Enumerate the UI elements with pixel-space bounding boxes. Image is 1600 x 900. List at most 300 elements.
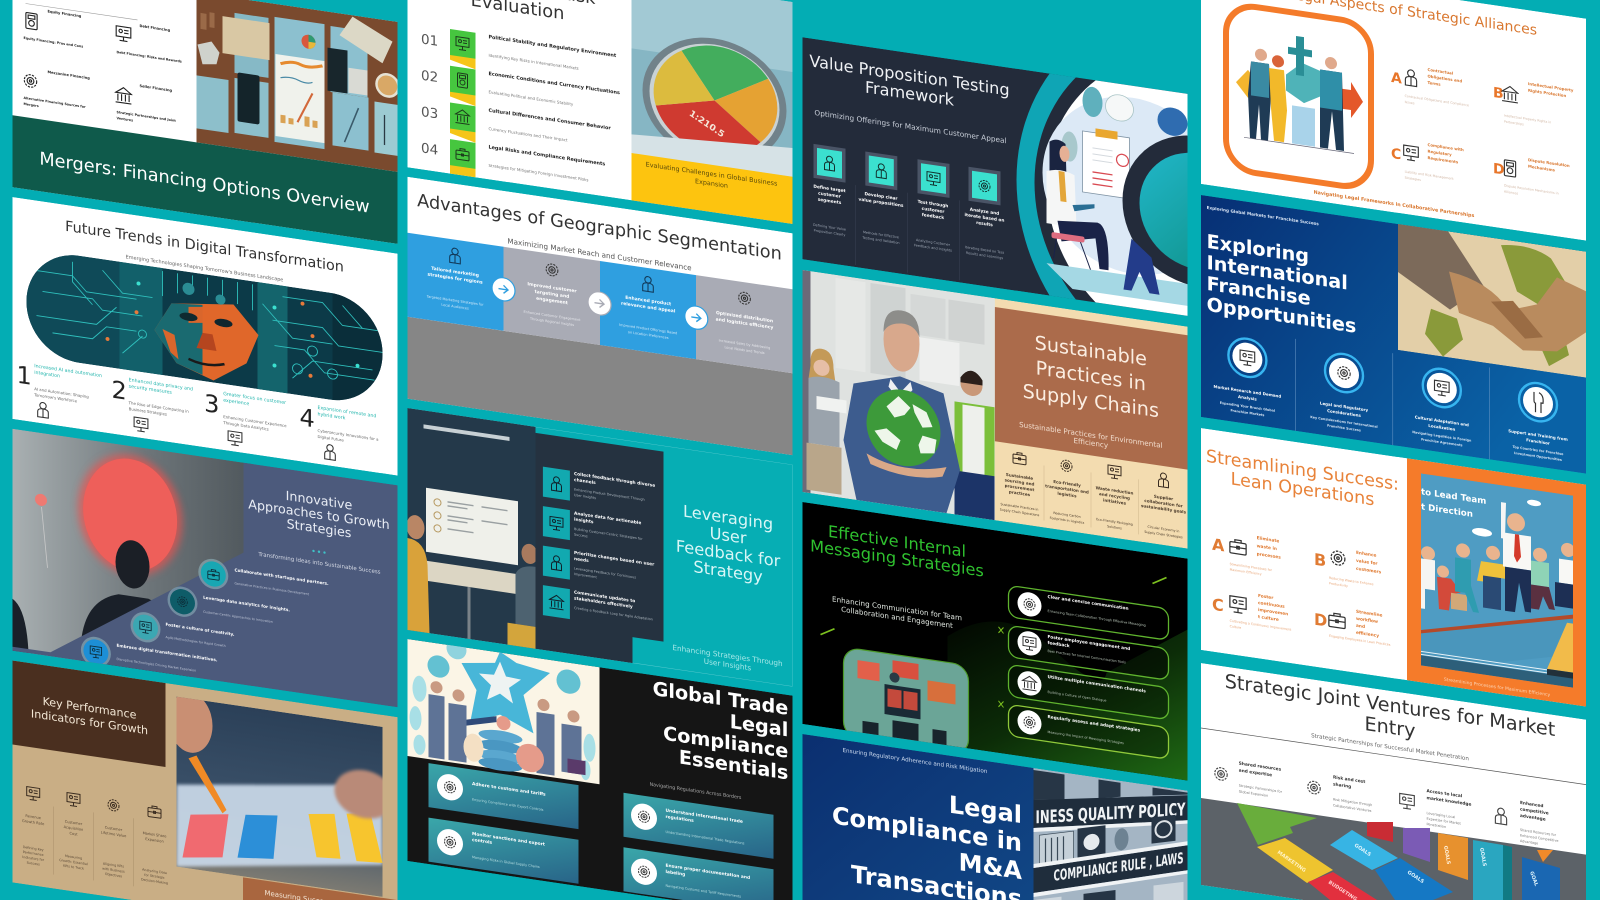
- column 2: [1045, 457, 1089, 526]
- column 2: Reducing Carbon: [1053, 511, 1081, 519]
- column 1: strategies for regions: [428, 272, 483, 286]
- card 4: [624, 847, 774, 900]
- arrow 1: [492, 276, 515, 303]
- step 2: Methods for Effective: [863, 230, 899, 239]
- item: revenue growth rate: Revenue: [25, 814, 41, 820]
- title: Exploring: [1207, 230, 1309, 268]
- item B: [1314, 544, 1382, 593]
- item 2: Enhanced data privacy and: [129, 378, 193, 393]
- item: revenue growth rate: Defining Key: [23, 845, 44, 852]
- item 1: Shared resources: [1239, 762, 1281, 773]
- column 3: on Location Preferences: [628, 330, 669, 340]
- item 2: insights: [574, 516, 594, 525]
- card 1: Ensuring Compliance with Export Controls: [472, 797, 544, 812]
- title: Framework: [865, 78, 955, 110]
- item B: Reducing Waste to Enhance: [1329, 576, 1373, 586]
- item: customer acquisition cost: Cost: [70, 831, 78, 837]
- item 4: advantage: [1520, 813, 1546, 823]
- title: Future Trends in Digital Transformation: [65, 219, 344, 276]
- step 2: [859, 151, 904, 246]
- item 2: Leverage data analytics for insights.: [203, 595, 290, 613]
- item D: [1314, 603, 1391, 647]
- arrow 2: [588, 290, 611, 317]
- item: market share expansion: Decision-Making: [141, 877, 168, 885]
- subtitle: Strategic Partnerships for Successful Market Penetration: [1311, 733, 1469, 762]
- item 2: [168, 586, 290, 623]
- item C: continuous: [1258, 600, 1285, 610]
- item 4: Disruptive Technologies Driving Market Expansion: [116, 657, 196, 673]
- title: Compliance: [663, 722, 788, 763]
- title: Opportunities: [1207, 293, 1356, 338]
- title band: [12, 115, 398, 244]
- column 1: Supply Chain Operations: [1000, 508, 1040, 517]
- item 2: Risk and cost: [1333, 775, 1365, 785]
- item B: B: [1314, 550, 1326, 570]
- step 4: Analyze and: [970, 208, 999, 217]
- step 3: customer: [922, 206, 945, 215]
- title box: [12, 660, 166, 767]
- subtitle: Ensuring Regulatory Adherence and Risk Mitigation: [842, 748, 988, 775]
- item 1: Increased AI and automation: [34, 364, 102, 379]
- image: team illustration: [1421, 473, 1575, 693]
- eyebrow: Exploring Global Markets for Franchise Success: [1207, 205, 1319, 226]
- item C: C: [1391, 146, 1401, 163]
- card 4: Measuring the Impact of Messaging Strategies: [1048, 730, 1124, 745]
- photo floor: [1201, 798, 1586, 900]
- item D: Mechanisms: [1528, 164, 1556, 173]
- column 4: [1141, 470, 1187, 540]
- item 1: User Insights: [574, 493, 596, 500]
- item 3: Leveraging Feedback for Continuous: [574, 566, 636, 580]
- card 2: Managing Risks in Global Supply Chains: [472, 855, 540, 869]
- column 4: Supply Chain Strategies: [1144, 530, 1183, 539]
- item 4: Cybersecurity Innovations for a: [318, 428, 379, 442]
- title: Advantages of Geographic Segmentation: [417, 190, 782, 265]
- photo: coloured goal blocks: MARKETING: [1276, 850, 1307, 874]
- step 4: [965, 166, 1005, 261]
- item C: C: [1212, 595, 1224, 615]
- item: customer lifetime value: Customer: [105, 826, 122, 832]
- item: customer lifetime value: Objectives: [105, 872, 122, 878]
- title: Feedback for: [676, 537, 781, 571]
- item: customer lifetime value: Aligning KPIs: [103, 862, 124, 869]
- title: Mergers: Financing Options Overview: [39, 148, 370, 218]
- item B: Intellectual Property Rights in: [1504, 114, 1551, 124]
- item 3: Franchise Agreements: [1421, 437, 1463, 447]
- item D: Alliances: [1504, 190, 1519, 196]
- caption box: [243, 877, 398, 900]
- slide: Effective Internal Messaging Strategies: [802, 502, 1188, 788]
- item 1: [19, 364, 102, 419]
- column 4: Optimized distribution: [716, 311, 773, 324]
- grey lower area: [408, 317, 792, 455]
- item: revenue growth rate: Performance: [23, 850, 44, 857]
- item 3: needs: [574, 556, 589, 564]
- subtitle: Sustainable Practices for Environmental: [1019, 420, 1162, 450]
- photo: meeting room: [406, 408, 538, 649]
- slide: Leveraging User Feedback: [406, 408, 792, 687]
- item A: [1212, 529, 1281, 579]
- items: financing types: Equity Financing: Pros and Cons: [23, 36, 83, 49]
- item 01: Political Stability and Regulatory Environment: [488, 34, 617, 59]
- accents: [820, 527, 1166, 732]
- item D: efficiency: [1356, 630, 1379, 639]
- title: Innovative: [286, 489, 352, 514]
- item A: Issues: [1405, 100, 1415, 105]
- item 4: [543, 585, 653, 631]
- item A: Streamlining Processes for: [1230, 562, 1272, 572]
- title: Lean Operations: [1231, 469, 1374, 510]
- item 3: [1400, 784, 1471, 833]
- step 2: value propositions: [859, 196, 904, 209]
- accent dots: [312, 550, 326, 554]
- item 1: 1: [16, 361, 32, 391]
- title: Global Trade: [653, 677, 788, 720]
- title: Streamlining Success:: [1206, 447, 1399, 495]
- card 1: Clear and concise communication: [1048, 594, 1129, 612]
- item 2: The Rise of Edge Computing in: [129, 400, 189, 414]
- card 3: regulations: [666, 814, 694, 824]
- image: control room: [844, 647, 968, 755]
- item 1: Enhancing Product Development Through: [574, 487, 645, 502]
- item: customer acquisition cost: Measuring: [65, 854, 82, 860]
- photo: coloured goal blocks: GOALS: [1442, 845, 1451, 865]
- item 3: [130, 612, 234, 647]
- item C: Regulatory: [1428, 149, 1452, 157]
- column 3: and recycling: [1099, 491, 1130, 501]
- item 2: Collaborative Ventures: [1333, 803, 1372, 813]
- item 4: Enhanced Competitive: [1520, 833, 1558, 843]
- step 3: Feedback and Insights: [914, 243, 952, 253]
- column 1: Local Audiences: [441, 303, 469, 311]
- title: Strategy: [693, 557, 763, 586]
- column 4: Local Needs and Trends: [724, 345, 765, 355]
- item: customer lifetime value: [101, 798, 127, 879]
- item 2: Key Considerations for International: [1310, 415, 1378, 429]
- item 4: Shared Resources for: [1520, 828, 1556, 837]
- column 1: Sustainable: [1006, 472, 1033, 481]
- footer caption: Streamlining Processes for Maximum Efficiency: [1444, 677, 1550, 698]
- title: Entry: [1364, 712, 1416, 743]
- slide: Streamlining Success Lean Operations: [1201, 428, 1586, 707]
- item C: [1391, 137, 1464, 188]
- slide: Legal Compliance in M&A Transactions: [802, 734, 1188, 900]
- card 2: Foster employee engagement and: [1048, 635, 1130, 652]
- card 3: Understanding International Trade Regulations: [666, 830, 745, 846]
- item C: improvemen: [1258, 607, 1288, 617]
- items: financing types: Mergers: [23, 102, 39, 108]
- item 4: hybrid work: [318, 411, 346, 421]
- column 3: Eco-Friendly Packaging: [1096, 517, 1133, 527]
- card 2: controls: [472, 837, 492, 846]
- item: customer acquisition cost: Acquisition: [64, 825, 83, 832]
- column 1: Sustainable Practices in: [1001, 502, 1038, 512]
- step 1: Defining Your Value: [813, 223, 846, 232]
- title: Messaging Strategies: [810, 536, 984, 581]
- slide: Legal Aspects of Strategic Alliances: [1201, 0, 1586, 241]
- step 1: [813, 144, 846, 237]
- card 3: [1008, 664, 1168, 720]
- item 3: Navigating Legalities in Foreign: [1412, 430, 1471, 443]
- item D: workflow: [1356, 616, 1378, 625]
- item C: Strategies: [1405, 176, 1421, 182]
- item 3: Agile Methodologies for Rapid Growth: [165, 635, 226, 648]
- item: market share expansion: Analyzing Data: [142, 868, 167, 875]
- column 1: Targeted Marketing Strategies for: [427, 295, 484, 307]
- card 1: [428, 763, 578, 829]
- photo: coloured goal blocks: GOALS: [1478, 847, 1487, 867]
- column 2: Enhanced Customer Engagement: [524, 310, 580, 322]
- card 4: labeling: [666, 869, 685, 878]
- item: market share expansion: Market Share: [143, 831, 166, 839]
- title: Compliance in: [832, 801, 1022, 857]
- item 03: 03: [421, 104, 438, 122]
- item 1: Franchise Markets: [1230, 408, 1264, 417]
- item 04: [421, 135, 605, 196]
- item 02: 02: [421, 68, 438, 86]
- slide: Sustainable Practices in Supply Chains: [802, 270, 1188, 549]
- item: customer lifetime value: Lifetime Value: [101, 830, 127, 838]
- step 4: Iterating Based on Test: [965, 245, 1004, 255]
- item C: Foster: [1258, 594, 1273, 601]
- item 2: security measures: [129, 384, 172, 396]
- item 2: 2: [112, 376, 127, 406]
- panel: blue-grey: [12, 462, 398, 708]
- item D: D: [1493, 161, 1505, 179]
- item 03: Cultural Differences and Consumer Behavior: [488, 108, 611, 132]
- photo: pencil on chart: [176, 696, 382, 897]
- item 2: [543, 506, 643, 551]
- item 4: 4: [300, 403, 315, 433]
- card 2: [428, 818, 578, 884]
- item 1: Strategic Partnerships for: [1239, 784, 1282, 794]
- column 1: practices: [1009, 489, 1031, 497]
- items: financing types: Alternative Financing Sources for: [24, 96, 86, 109]
- item 3: experience: [223, 397, 249, 407]
- item 4: Enhanced: [1520, 801, 1544, 809]
- items: financing types: [24, 3, 182, 130]
- title: Supply Chains: [1023, 379, 1159, 422]
- card 3: Understand international trade: [666, 809, 743, 825]
- item: revenue growth rate: [22, 786, 45, 867]
- column 3: Improved Product Offerings Based: [619, 323, 677, 335]
- title: International: [1207, 251, 1348, 295]
- title: Sustainable: [1035, 331, 1147, 371]
- subtitle: Emerging Technologies Shaping Tomorrow's Business Landscape: [126, 254, 283, 283]
- item 3: [206, 392, 286, 446]
- green wave: [948, 594, 1188, 781]
- column 4: Circular Economy in: [1148, 525, 1179, 533]
- column 2: Improved customer: [527, 282, 577, 295]
- item 4: Digital Future: [318, 434, 344, 443]
- title: Effective Internal: [828, 522, 966, 561]
- caption band: [632, 153, 792, 224]
- card 4: [1008, 704, 1168, 759]
- item D: Dispute Resolution: [1528, 157, 1570, 168]
- item 4: stakeholders effectively: [574, 595, 633, 610]
- card 3: Utilize multiple communication channels: [1048, 674, 1146, 695]
- item: revenue growth rate: Success: [27, 861, 40, 867]
- subtitle: Navigating Regulations Across Borders: [650, 782, 742, 801]
- slide: Advantages of Geographic Segmentation: [408, 177, 792, 455]
- item 3: Access to local: [1426, 789, 1462, 799]
- photo: gauge under magnifier: 1:210.5: [687, 109, 726, 140]
- photo: policy and compliance board: INESS QUALITY POLICY: [1036, 800, 1186, 828]
- item 4: Franchisor: [1526, 437, 1550, 446]
- column 3: initiatives: [1103, 497, 1127, 506]
- item B: Rights Protection: [1528, 88, 1566, 98]
- image: team illustration: t Direction: [1421, 502, 1473, 520]
- slide: Global Trade Legal Compliance: [408, 632, 792, 900]
- item D: [1493, 152, 1570, 203]
- item 1: Tomorrow's Workforce: [33, 392, 78, 404]
- item 2: Franchise Success: [1327, 424, 1361, 432]
- step 3: [914, 159, 952, 253]
- item 1: and expertise: [1239, 768, 1272, 778]
- column 3: Solutions: [1107, 524, 1122, 530]
- column 1: procurement: [1005, 483, 1034, 492]
- item A: Terms: [1428, 80, 1441, 87]
- item 1: [1214, 334, 1281, 420]
- item 1: integration: [34, 370, 60, 379]
- item 3: Through Data Analytics: [222, 420, 269, 432]
- card 1: Enhancing Team Collaboration Through Effective Messaging: [1048, 609, 1146, 627]
- item 4: Advantage: [1520, 839, 1538, 846]
- slide: Mergers financing options: [12, 0, 398, 244]
- image: team illustration: to Lead Team: [1421, 487, 1486, 507]
- item 2: Risk Mitigation through: [1333, 797, 1372, 807]
- item 04: Strategies for Mitigating Foreign Investment Risks: [488, 163, 588, 182]
- item 1: [1215, 757, 1283, 800]
- title: Practices in: [1036, 356, 1146, 395]
- title: Indicators for Growth: [31, 707, 148, 737]
- title: Strategic Joint Ventures for Market: [1225, 670, 1555, 741]
- orange panel: [1407, 458, 1586, 707]
- slide: Key Performance Indicators: [12, 660, 398, 900]
- item 01: [422, 29, 616, 70]
- card 4: Navigating Customs and Tariff Requirements: [666, 884, 741, 899]
- item D: and: [1356, 623, 1365, 630]
- slide: Innovative Approaches to Growth Strategies: [12, 429, 398, 711]
- item A: Contractual: [1428, 67, 1453, 76]
- item 4: Embrace digital transformation initiatives.: [116, 643, 218, 663]
- column 1: Tailored marketing: [431, 267, 479, 279]
- item D: D: [1314, 610, 1327, 631]
- item 4: Creating a Feedback Loop for Agile Adaptation: [574, 606, 653, 622]
- step 1: customer: [818, 191, 842, 200]
- item: customer acquisition cost: KPIs to Track: [63, 864, 84, 871]
- column 3: relevance and appeal: [621, 301, 676, 315]
- item 4: Communicate updates to: [574, 590, 635, 604]
- photo: coloured goal blocks: GOALS: [1353, 843, 1372, 858]
- slide: Value Proposition Testing Framework: [802, 0, 1422, 442]
- item 3: Cultural Adaptation and: [1415, 414, 1469, 427]
- subtitle: Transforming Ideas into Sustainable Success: [257, 552, 381, 576]
- title: Value Proposition Testing: [809, 51, 1010, 100]
- photo: coloured goal blocks: GOALS: [1406, 870, 1425, 885]
- item 3: Foster a culture of creativity.: [165, 622, 235, 637]
- column 3: Waste reduction: [1096, 485, 1133, 496]
- item 4: [1508, 379, 1568, 463]
- item C: Liability and Risk Management: [1405, 170, 1454, 181]
- step 2: Testing and Validation: [861, 235, 900, 245]
- column 1: [1000, 450, 1040, 517]
- item 3: Localization: [1428, 423, 1455, 432]
- item 3: 3: [204, 389, 219, 419]
- item 3: [543, 545, 655, 592]
- item 02: [422, 66, 620, 106]
- item 2: Customer-Centric Approaches to Innovation: [203, 610, 273, 624]
- item 1: Market Research and Demand: [1214, 384, 1281, 399]
- column 3: [600, 261, 696, 359]
- item 1: Expanding Your Brand: Global: [1220, 401, 1275, 413]
- item 1: [543, 466, 655, 513]
- panel: dark item list: [536, 433, 664, 668]
- items: financing types: Equity Financing: [48, 9, 82, 18]
- column 1: [408, 233, 504, 331]
- subtitle: Maximizing Market Reach and Customer Relevance: [507, 236, 692, 273]
- item 04: 04: [421, 140, 438, 159]
- item 2: Success: [574, 532, 588, 539]
- title: Legal: [730, 710, 788, 741]
- image frame: partnership illustration: [1226, 3, 1371, 190]
- caption: Evaluating Challenges in Global Business: [646, 160, 777, 188]
- card 4: Regularly assess and adapt strategies: [1048, 714, 1141, 734]
- column 3: [1096, 463, 1133, 532]
- footer: Navigating Legal Frameworks in Collaborative Partnerships: [1314, 190, 1474, 219]
- item A: Eliminate: [1257, 536, 1279, 545]
- step 4: results: [976, 220, 993, 228]
- item 4: Investment Opportunities: [1514, 451, 1562, 462]
- item 3: Prioritize changes based on user: [574, 551, 654, 568]
- arrow 3: [685, 304, 708, 331]
- column 2: Through Regional Insights: [529, 317, 574, 327]
- photo: policy and compliance board: COMPLIANCE RULE , LAWS: [1054, 849, 1184, 885]
- item D: Engaging Employees in Lean Practices: [1329, 634, 1391, 647]
- title: Strategies: [287, 517, 352, 542]
- item D: Streamline: [1356, 610, 1382, 619]
- step 3: feedback: [922, 212, 944, 221]
- step 4: Results and Learnings: [966, 251, 1003, 260]
- card 4: Ensure proper documentation and: [666, 864, 750, 881]
- step 1: Proposition Clearly: [814, 228, 845, 237]
- column 4: collaboration for: [1144, 498, 1184, 509]
- title: Key Performance: [43, 695, 136, 722]
- item 4: competitive: [1520, 806, 1549, 817]
- photo: desk with documents: [196, 0, 398, 172]
- item B: Partnerships: [1504, 120, 1524, 126]
- column 2: engagement: [536, 296, 569, 306]
- item: customer acquisition cost: Growth: Essential: [59, 858, 88, 866]
- item 2: [1310, 349, 1378, 435]
- item 1: Analysis: [1238, 394, 1257, 402]
- item: customer lifetime value: with Business: [102, 867, 125, 874]
- item 2: Business Strategies: [129, 406, 167, 417]
- item A: Contractual Obligations and Compliance: [1405, 94, 1469, 107]
- slide: Strategic Joint Ventures for Market Entry: [1201, 663, 1586, 900]
- item B: Enhance: [1356, 551, 1376, 559]
- decorative rings and illustration: [1016, 0, 1422, 442]
- title: User: [710, 523, 747, 548]
- item 3: [1412, 365, 1472, 449]
- column 4: Supplier: [1154, 494, 1173, 501]
- item 4: [80, 636, 218, 672]
- column 2: transportation and: [1045, 483, 1089, 495]
- items: financing types: Seller Financing: [140, 84, 173, 93]
- item 3: Penetration: [1426, 822, 1446, 829]
- item A: [1391, 62, 1469, 113]
- step 3: Test through: [918, 200, 948, 209]
